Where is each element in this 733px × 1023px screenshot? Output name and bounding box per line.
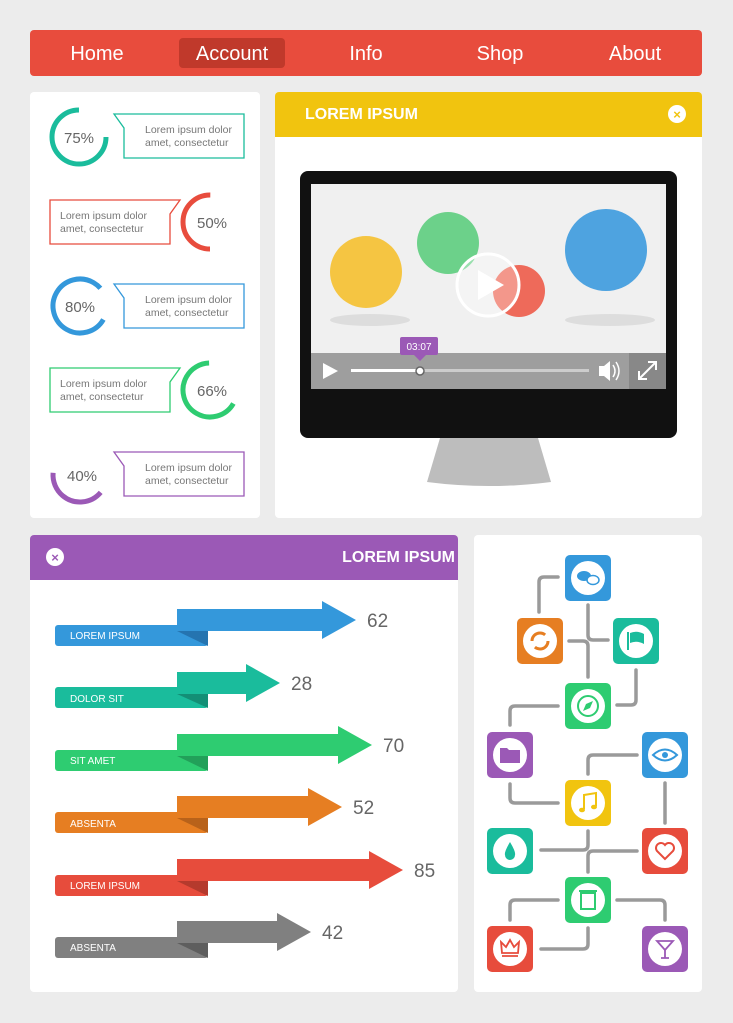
panel: icon network bbox=[474, 535, 702, 992]
callout 40: amet, consectetur bbox=[145, 475, 229, 487]
nav bar: About bbox=[609, 43, 662, 65]
gauge 50%: 50% bbox=[197, 215, 227, 232]
arrow 85: LOREM IPSUM bbox=[70, 881, 140, 892]
arrow 42: ABSENTA bbox=[70, 943, 116, 954]
gauge 40%: 40% bbox=[67, 468, 97, 485]
callout 80: Lorem ipsum dolor bbox=[145, 294, 232, 306]
arrow 70 bbox=[55, 726, 404, 771]
callout 75: amet, consectetur bbox=[145, 137, 229, 149]
callout 75 bbox=[114, 114, 244, 158]
arrow 28 bbox=[55, 664, 312, 708]
icon: drop bbox=[487, 828, 533, 874]
icon: refresh bbox=[517, 618, 563, 664]
panel: video: × bbox=[673, 107, 681, 122]
arrow 62: LOREM IPSUM bbox=[70, 631, 140, 642]
arrow 28: 28 bbox=[291, 674, 312, 695]
arrow 62 bbox=[55, 601, 388, 646]
icon: chat bbox=[565, 555, 611, 601]
nav bar: Shop bbox=[477, 43, 523, 65]
callout 50: Lorem ipsum dolor bbox=[60, 210, 147, 222]
arrow 62: 62 bbox=[367, 611, 388, 632]
video controls: 03:07 bbox=[406, 342, 432, 353]
callout 75: Lorem ipsum dolor bbox=[145, 124, 232, 136]
icon: crown bbox=[487, 926, 533, 972]
gauge 75%: 75% bbox=[64, 130, 94, 147]
panel: arrow bar chart bbox=[30, 535, 458, 992]
arrow 42: 42 bbox=[322, 923, 343, 944]
arrow 70: 70 bbox=[383, 736, 404, 757]
monitor bbox=[300, 171, 677, 486]
callout 66: amet, consectetur bbox=[60, 391, 144, 403]
gauge 75% bbox=[52, 110, 106, 164]
panel: arrow bar chart: LOREM IPSUM bbox=[342, 549, 455, 566]
arrow 28: DOLOR SIT bbox=[70, 694, 124, 705]
callout 66: Lorem ipsum dolor bbox=[60, 378, 147, 390]
icon: music bbox=[565, 780, 611, 826]
nav bar: Home bbox=[70, 43, 124, 65]
icon: trash bbox=[565, 877, 611, 923]
callout 80: amet, consectetur bbox=[145, 307, 229, 319]
callout 40: Lorem ipsum dolor bbox=[145, 462, 232, 474]
gauge 66% bbox=[173, 353, 247, 427]
panel: gauges bbox=[30, 92, 260, 518]
nav bar: Info bbox=[349, 43, 383, 65]
nav bar: Account bbox=[196, 43, 269, 65]
icon: heart bbox=[642, 828, 688, 874]
callout 80 bbox=[114, 284, 244, 328]
panel: arrow bar chart: × bbox=[51, 550, 59, 565]
panel: video bbox=[275, 92, 702, 518]
icon: eye bbox=[642, 732, 688, 778]
callout 40 bbox=[114, 452, 244, 496]
icon: flag bbox=[613, 618, 659, 664]
arrow 42 bbox=[55, 913, 343, 958]
gauge 80% bbox=[43, 269, 117, 343]
arrow 52: 52 bbox=[353, 798, 374, 819]
callout 66 bbox=[50, 368, 180, 412]
gauge 50% bbox=[183, 195, 237, 249]
icon: folder bbox=[487, 732, 533, 778]
arrow 85: 85 bbox=[414, 861, 435, 882]
arrow 52: ABSENTA bbox=[70, 819, 116, 830]
icon: compass bbox=[565, 683, 611, 729]
panel: video: LOREM IPSUM bbox=[305, 106, 418, 123]
gauge 66%: 66% bbox=[197, 383, 227, 400]
arrow 52 bbox=[55, 788, 374, 833]
video controls bbox=[311, 337, 666, 389]
callout 50 bbox=[50, 200, 180, 244]
connectors bbox=[510, 577, 665, 949]
gauge 80%: 80% bbox=[65, 299, 95, 316]
callout 50: amet, consectetur bbox=[60, 223, 144, 235]
arrow 70: SIT AMET bbox=[70, 756, 115, 767]
icon: cocktail bbox=[642, 926, 688, 972]
nav bar bbox=[30, 30, 702, 76]
arrow 85 bbox=[55, 851, 435, 896]
gauge 40% bbox=[42, 437, 118, 513]
